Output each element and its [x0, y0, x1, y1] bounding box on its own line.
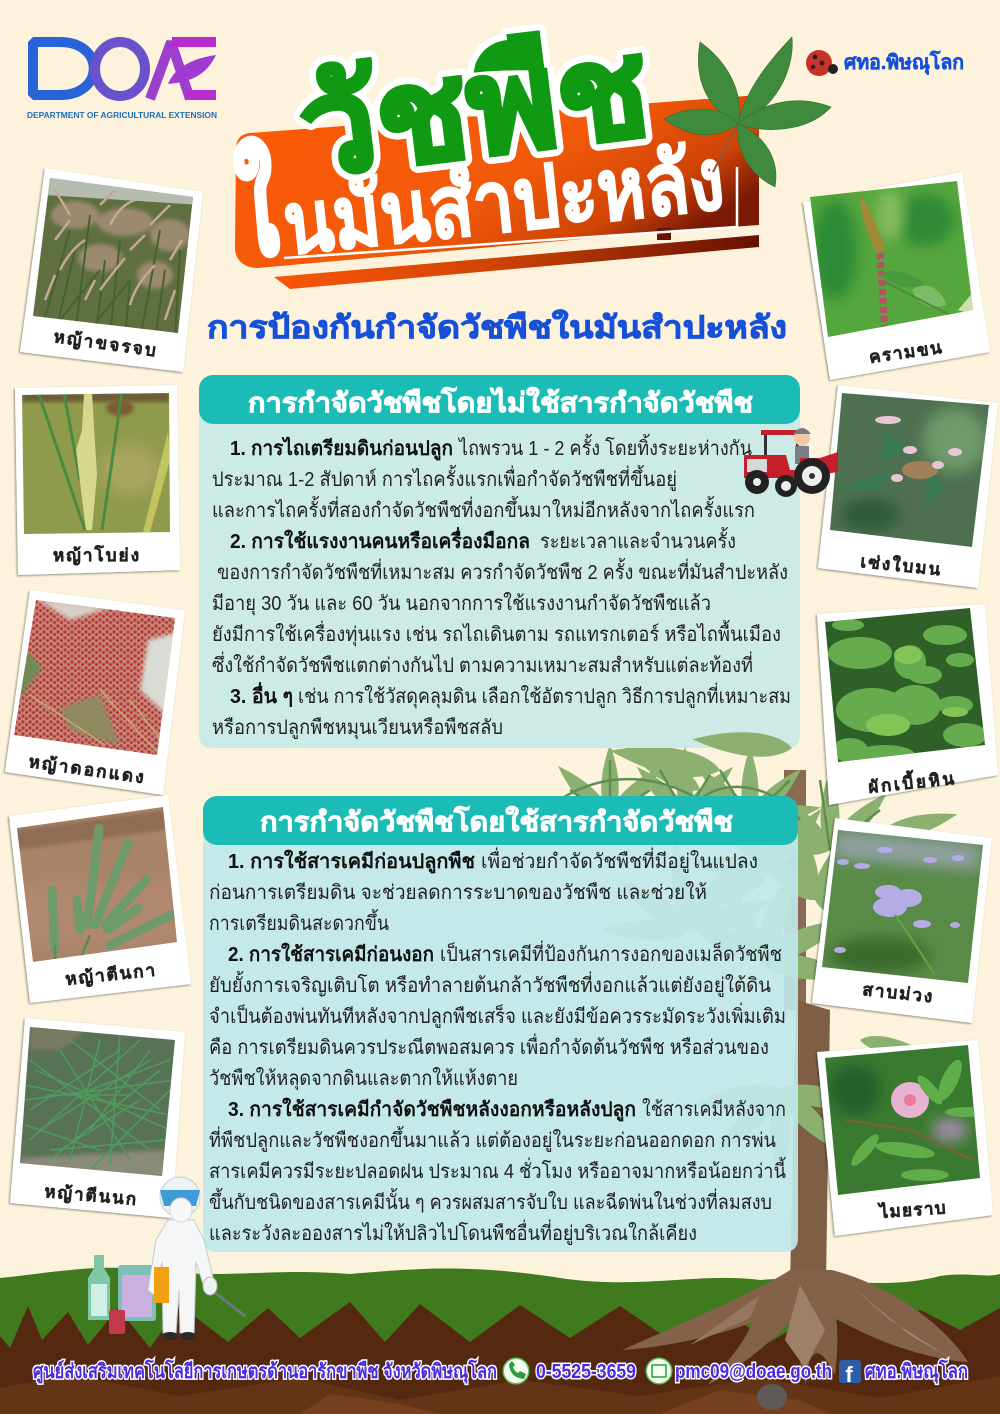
background cassava tree	[536, 737, 960, 1285]
text block: three methods: ยับยั้งการเจริญเติบโต หรือทำลายต้นกล้าวัชพืชที่งอกแล้วแต่ยังอยู่ใต้ดิน	[209, 971, 771, 998]
photo card: หญ้าตีนกา	[9, 795, 191, 1003]
text block: three methods: และการไถครั้งที่สองกำจัดวัชพืชที่งอกขึ้นมาใหม่อีกหลังจากไถครั้งแรก	[212, 496, 755, 522]
icon: facebook	[839, 1360, 861, 1387]
text block: three methods: ก่อนการเตรียมดิน จะช่วยลดการระบาดของวัชพืช และช่วยให้	[209, 881, 707, 904]
photo card: หญ้าดอกแดง	[5, 590, 185, 795]
text block: three methods: 2. การใช้แรงงานคนหรือเครื่องมือกล	[230, 526, 530, 553]
text block: three methods: เพื่อช่วยกำจัดวัชพืชที่มีอยู่ในแปลง	[481, 847, 758, 874]
subtitle: การป้องกันกำจัดวัชพืชในมันสำปะหลัง	[207, 309, 787, 345]
center name: ศูนย์ส่งเสริมเทคโนโลยีการเกษตรด้านอารักขาพืช จังหวัดพิษณุโลก	[33, 1359, 497, 1385]
text block: three methods: ซึ่งใช้กำจัดวัชพืชแตกต่างกันไป ตามความเหมาะสมสำหรับแต่ละท้องที่	[212, 651, 753, 677]
text block: three methods: ยังมีการใช้เครื่องทุ่นแรง เช่น รถไถเดินตาม รถแทรกเตอร์ หรือไถพื้นเมือง	[212, 620, 781, 647]
photo card: หญ้าโบย่ง	[15, 385, 180, 575]
text block: three methods: เช่น การใช้วัสดุคลุมดิน เลือกใช้อัตราปลูก วิธีการปลูกที่เหมาะสม	[298, 682, 791, 709]
phone number: 0-5525-3659	[536, 1361, 636, 1383]
text block: three methods: และระวังละอองสารไม่ให้ปลิวไปโดนพืชอื่นที่อยู่บริเวณใกล้เคียง	[209, 1219, 697, 1246]
text block: three methods: ที่พืชปลูกและวัชพืชงอกขึ้นมาแล้ว แต่ต้องอยู่ในระยะก่อนออกดอก การพ่น	[209, 1126, 776, 1153]
logo: DOAE: DEPARTMENT OF AGRICULTURAL EXTENSION	[27, 110, 217, 120]
text block: three methods: มีอายุ 30 วัน และ 60 วัน นอกจากการใช้แรงงานกำจัดวัชพืชแล้ว	[212, 592, 711, 616]
heading: without herbicide: การกำจัดวัชพืชโดยไม่ใช้สารกำจัดวัชพืช	[248, 386, 753, 418]
title banner	[232, 15, 759, 289]
text block: three methods: วัชพืชให้หลุดจากดินและตากให้แห้งตาย	[209, 1067, 518, 1091]
photo card: หญ้าตีนนก	[10, 1018, 185, 1218]
ladybug icon and office name	[806, 50, 964, 76]
title word outline: วัชพืช: วัชพืช	[291, 15, 657, 205]
icon: email	[647, 1359, 671, 1383]
banner back ribbon	[274, 235, 759, 289]
banner line: นมันสำปะหลัง: นมันสำปะหลัง	[279, 130, 729, 272]
text block: three methods: สารเคมีควรมีระยะปลอดฝน ประมาณ 4 ชั่วโมง หรืออาจมากหรือน้อยกว่านี้	[209, 1157, 786, 1183]
photo card: ไมยราบ	[817, 1040, 993, 1236]
text block: three methods: ขึ้นกับชนิดของสารเคมีนั้น ๆ ควรผสมสารจับใบ และฉีดพ่นในช่วงที่ลมสงบ	[209, 1188, 772, 1214]
ground and soil	[0, 1268, 1000, 1414]
text block: three methods: 3. การใช้สารเคมีกำจัดวัชพืชหลังงอกหรือหลังปลูก	[228, 1097, 636, 1123]
text block: three methods: ของการกำจัดวัชพืชที่เหมาะสม ควรกำจัดวัชพืช 2 ครั้ง ขณะที่มันสำปะหลัง	[217, 558, 788, 584]
photo card: ไมยราบ: ไมยราบ	[877, 1197, 948, 1222]
photo card: เซ่งใบมน	[818, 385, 998, 588]
photo card: ครามขน	[803, 172, 990, 380]
text block: three methods: คือ การเตรียมดินควรประณีตพอสมควร เพื่อกำจัดต้นวัชพืช หรือส่วนของ	[209, 1033, 769, 1059]
photo card: หญ้าขจรจบ	[20, 168, 203, 372]
heading: with herbicide: การกำจัดวัชพืชโดยใช้สารกำจัดวัชพืช	[260, 805, 733, 837]
panel: weed control without herbicide	[199, 375, 800, 748]
text block: three methods: หรือการปลูกพืชหมุนเวียนหรือพืชสลับ	[212, 717, 503, 740]
photo card: เซ่งใบมน: เซ่งใบมน	[860, 551, 943, 580]
photo card: ครามขน: ครามขน	[868, 338, 945, 367]
photo card: หญ้าตีนกา: หญ้าตีนกา	[64, 959, 158, 990]
logo: DOAE	[27, 42, 217, 120]
cassava roots	[622, 1270, 968, 1385]
photo card: หญ้าขจรจบ: หญ้าขจรจบ	[52, 327, 159, 362]
icon: worker spraying with chemical containers	[88, 1177, 245, 1340]
text block: three methods: การเตรียมดินสะดวกขึ้น	[209, 909, 389, 935]
photo card: สาบม่วง	[812, 818, 992, 1023]
photo card: ผักเบี้ยหิน	[817, 604, 998, 805]
icon: phone	[504, 1359, 528, 1383]
text block: three methods: ใช้สารเคมีหลังจาก	[642, 1098, 786, 1121]
banner letter: ใ: ใ	[232, 137, 282, 283]
photo card: หญ้าตีนนก: หญ้าตีนนก	[44, 1181, 139, 1210]
text block: three methods	[212, 434, 791, 740]
footer contact bar	[33, 1359, 968, 1387]
text block: three methods: จำเป็นต้องพ่นทันทีหลังจากปลูกพืชเสร็จ และยังมีข้อควรระมัดระวังเพิ่มเติม	[209, 1002, 786, 1029]
text block: three methods: 1. การใช้สารเคมีก่อนปลูกพืช	[228, 849, 475, 875]
text block: three methods: 1. การไถเตรียมดินก่อนปลูก	[230, 436, 453, 462]
text block: three methods: ระยะเวลาและจำนวนครั้ง	[540, 527, 736, 553]
ladybug icon and office name: ศทอ.พิษณุโลก	[844, 50, 964, 75]
text block: three methods	[209, 847, 786, 1246]
text block: three methods: เป็นสารเคมีที่ป้องกันการงอกของเมล็ดวัชพืช	[440, 940, 782, 966]
text block: three methods: ไถพรวน 1 - 2 ครั้ง โดยทิ้งระยะห่างกัน	[457, 434, 752, 460]
icon: farmer on red tractor	[744, 428, 838, 497]
icon: facebook: f	[845, 1362, 853, 1387]
text block: three methods: ประมาณ 1-2 สัปดาห์ การไถครั้งแรกเพื่อกำจัดวัชพืชที่ขึ้นอยู่	[212, 465, 677, 492]
email address: pmc09@doae.go.th	[675, 1361, 832, 1383]
cassava leaf decoration	[664, 37, 831, 187]
photo card: ผักเบี้ยหิน: ผักเบี้ยหิน	[867, 765, 957, 797]
panel: weed control with herbicide	[203, 796, 798, 1252]
photo card: สาบม่วง: สาบม่วง	[862, 980, 935, 1007]
title word fill: วัชพืช: วัชพืช	[291, 15, 657, 205]
text block: three methods: 2. การใช้สารเคมีก่อนงอก	[228, 942, 434, 966]
photo card: หญ้าดอกแดง: หญ้าดอกแดง	[27, 752, 147, 788]
text block: three methods: 3. อื่น ๆ	[230, 681, 293, 708]
facebook name: ศทอ.พิษณุโลก	[865, 1359, 968, 1384]
photo card: หญ้าโบย่ง: หญ้าโบย่ง	[53, 545, 141, 566]
leaf overlapping panel corner	[691, 727, 793, 760]
